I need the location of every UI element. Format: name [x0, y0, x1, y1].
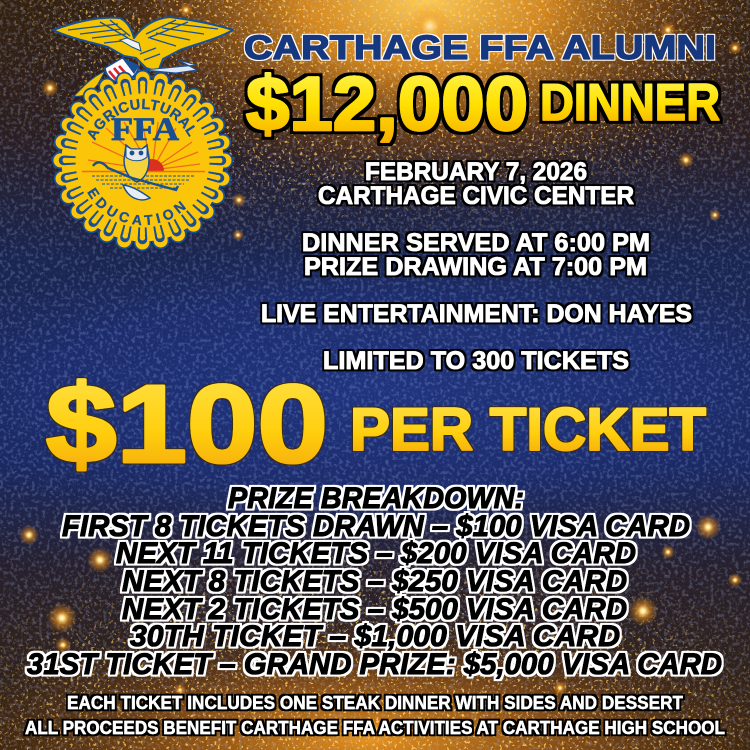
prize tier 1: FIRST 8 TICKETS DRAWN – $100 VISA CARD: [62, 510, 690, 543]
prize tier 2: NEXT 11 TICKETS – $200 VISA CARD: [116, 537, 636, 570]
dinner note: EACH TICKET INCLUDES ONE STEAK DINNER WITH SIDES AND DESSERT: [67, 692, 684, 713]
dinner time: DINNER SERVED AT 6:00 PM: [302, 229, 650, 257]
title: Carthage FFA Alumni: CARTHAGE FFA ALUMNI: [244, 29, 716, 67]
entertainment: LIVE ENTERTAINMENT: DON HAYES: [261, 300, 692, 328]
prize heading: PRIZE BREAKDOWN:: [228, 482, 524, 515]
event details: [261, 158, 692, 375]
date: FEBRUARY 7, 2026: [365, 158, 587, 186]
prize breakdown: [27, 482, 722, 681]
venue: CARTHAGE CIVIC CENTER: [318, 182, 634, 210]
emblem: owl: [124, 145, 149, 182]
emblem: eagle: [53, 17, 233, 96]
prize tier 3: NEXT 8 TICKETS – $250 VISA CARD: [122, 565, 627, 598]
ticket limit: LIMITED TO 300 TICKETS: [323, 347, 629, 375]
prize tier 4: NEXT 2 TICKETS – $500 VISA CARD: [122, 593, 627, 626]
emblem: AGRICULTURAL arc text: AGRICULTURAL: [88, 98, 195, 141]
emblem: sun rays and field: [82, 122, 205, 188]
heading: $12,000: $12,000: [246, 62, 528, 147]
emblem: EDUCATION arc text: EDUCATION: [87, 187, 186, 226]
price: per ticket: PER TICKET: [350, 396, 706, 463]
emblem: scalloped seal: [60, 78, 224, 242]
footer notes: [25, 692, 725, 738]
icon: FFA emblem: [52, 16, 234, 252]
heading: Dinner: DINNER: [540, 74, 720, 132]
drawing time: PRIZE DRAWING AT 7:00 PM: [304, 253, 647, 281]
prize tier 5: 30TH TICKET – $1,000 VISA CARD: [130, 620, 620, 653]
grand prize: 31ST TICKET – GRAND PRIZE: $5,000 VISA CARD: [27, 648, 722, 681]
price: $100: $100: [46, 363, 328, 486]
emblem: plow: [93, 162, 178, 200]
emblem: FFA letters: FFA: [111, 112, 179, 148]
